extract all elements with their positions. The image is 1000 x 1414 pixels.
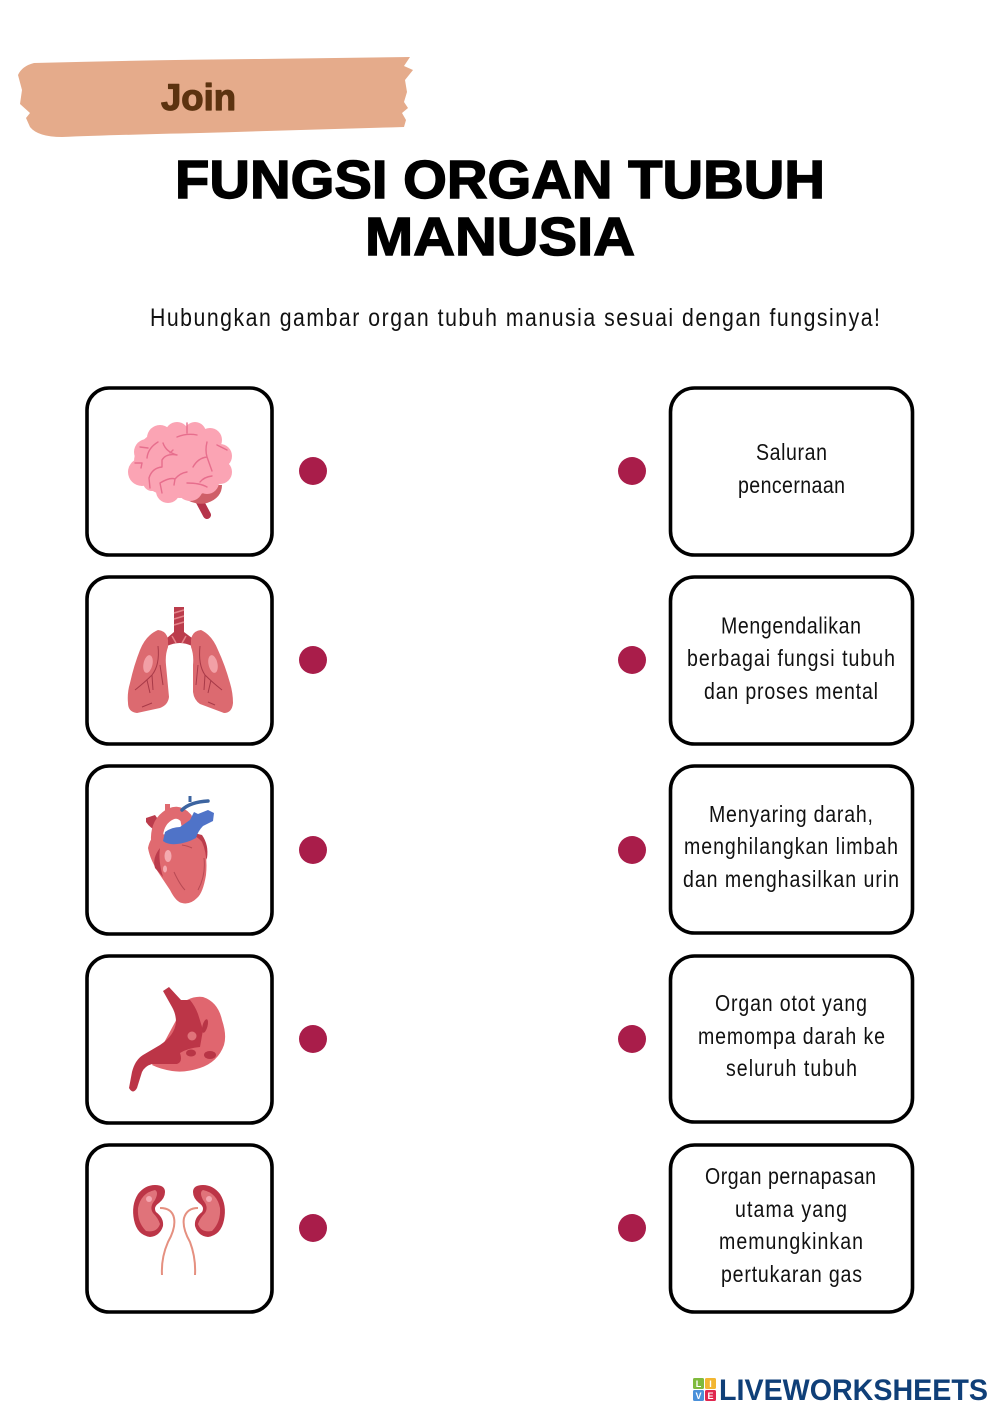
panel: kidneys card <box>87 1145 272 1312</box>
panel: kidney function definition: dan menghasilkan urin <box>683 867 899 892</box>
icon: brain <box>128 422 232 515</box>
panel: heart card <box>87 766 272 934</box>
panel: lungs card <box>87 577 272 744</box>
panel: lung function definition: pertukaran gas <box>721 1262 862 1287</box>
logo: liveworksheets: E <box>707 1391 714 1401</box>
connection dots: right column <box>618 457 646 1242</box>
panel: brain function definition: berbagai fungsi tubuh <box>687 646 895 671</box>
connection dots: left column <box>299 457 327 1242</box>
panel: lung function definition: memungkinkan <box>719 1229 863 1254</box>
icon: kidneys <box>133 1185 225 1275</box>
logo: liveworksheets: L <box>696 1379 702 1389</box>
panel: brain card <box>87 388 272 555</box>
panel: stomach card <box>87 956 272 1123</box>
panel: kidney function definition: menghilangkan limbah <box>684 834 898 859</box>
panel: brain function definition <box>670 577 912 744</box>
panel: heart function definition: seluruh tubuh <box>726 1056 857 1081</box>
title <box>175 150 825 267</box>
icon: stomach <box>129 987 225 1092</box>
logo: liveworksheets: I <box>709 1379 712 1389</box>
panel: kidney function definition <box>670 766 912 933</box>
icon: heart <box>146 796 214 903</box>
panel: lung function definition: Organ pernapasan <box>705 1164 876 1189</box>
panel: heart function definition <box>670 956 912 1122</box>
panel: digestive tract definition <box>670 388 912 555</box>
title: FUNGSI ORGAN TUBUH <box>175 150 825 210</box>
logo: liveworksheets: LIVEWORKSHEETS <box>719 1374 988 1407</box>
panel: digestive tract definition: pencernaan <box>738 473 845 498</box>
panel: brain function definition: dan proses mental <box>704 679 878 704</box>
logo: liveworksheets: V <box>695 1391 702 1401</box>
panel: digestive tract definition: Saluran <box>756 440 827 465</box>
instruction text: Hubungkan gambar organ tubuh manusia sesuai dengan fungsinya! <box>150 303 880 331</box>
panel: kidney function definition: Menyaring darah, <box>709 802 873 827</box>
brush banner: Join <box>18 57 413 137</box>
brush banner: Join: Join <box>161 77 236 118</box>
panel: lung function definition: utama yang <box>735 1197 847 1222</box>
panel: brain function definition: Mengendalikan <box>721 613 861 639</box>
icon: lungs <box>128 607 233 713</box>
panel: lung function definition <box>670 1145 912 1312</box>
panel: heart function definition: Organ otot yang <box>715 991 867 1016</box>
panel: heart function definition: memompa darah ke <box>698 1024 885 1049</box>
title: MANUSIA <box>365 207 635 267</box>
